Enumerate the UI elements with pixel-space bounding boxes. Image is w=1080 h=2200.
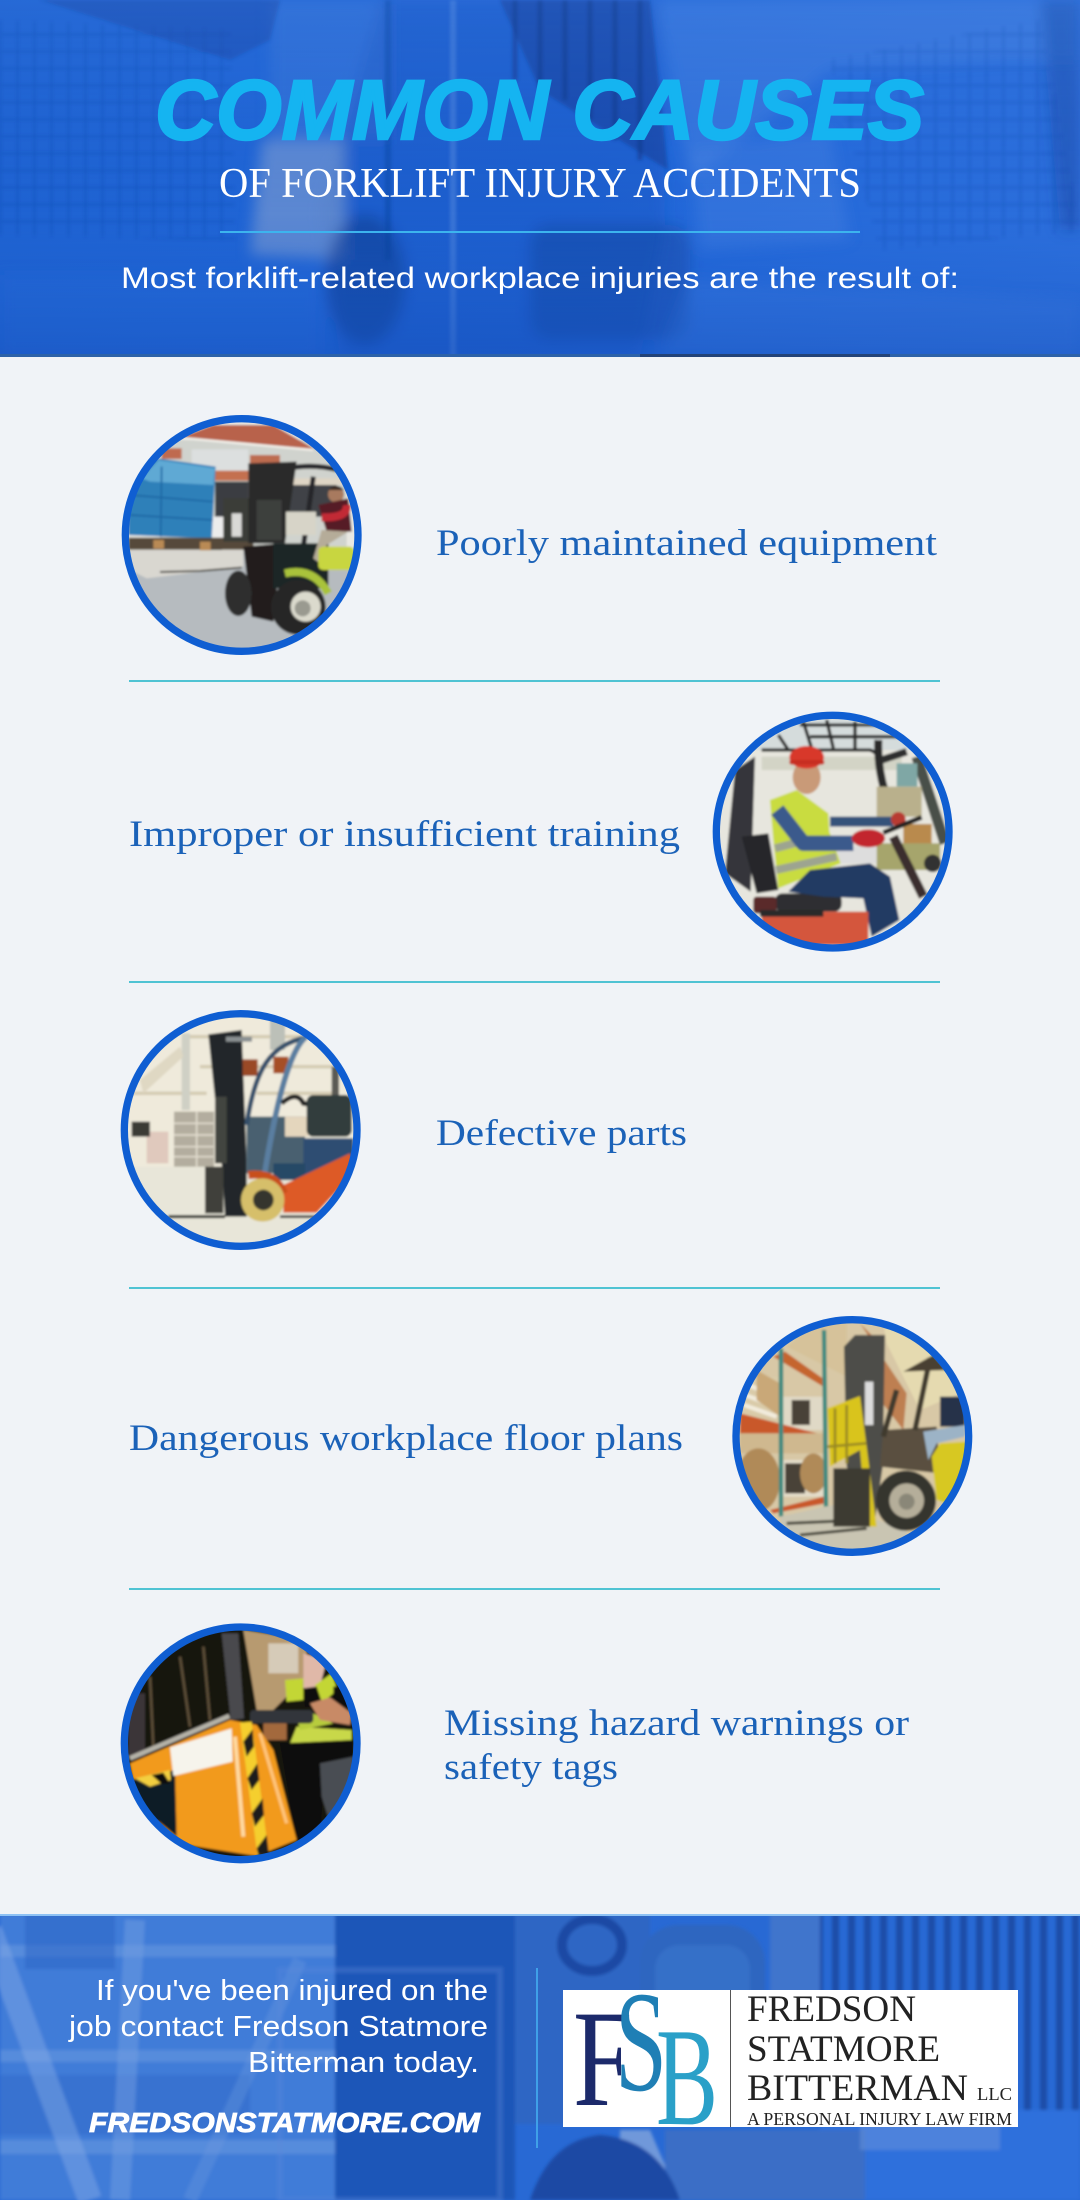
footer background photo (0, 1914, 1080, 2200)
cause 4: dangerous floor plans (130, 1316, 972, 1556)
logo monogram: F (573, 1982, 633, 2135)
label 2: Improper or insufficient training (129, 814, 680, 855)
logo wordmark: STATMORE (747, 2029, 940, 2070)
logo monogram: B (656, 2000, 718, 2155)
cause 1: poorly maintained equipment (122, 415, 937, 655)
photo circle 4 (732, 1316, 972, 1556)
cause 2: improper training (129, 700, 970, 960)
logo (563, 1963, 1018, 2155)
logo wordmark: LLC (977, 2084, 1012, 2104)
label 5 (444, 1703, 909, 1788)
label 3: Defective parts (436, 1113, 687, 1154)
logo wordmark: A PERSONAL INJURY LAW FIRM (747, 2109, 1012, 2129)
cause 5: missing hazard warnings (100, 1610, 909, 1870)
title: COMMON CAUSES (155, 63, 924, 157)
panel: footer (0, 1914, 1080, 2200)
label 5: safety tags (444, 1747, 618, 1788)
label 1: Poorly maintained equipment (436, 523, 938, 564)
logo wordmark (747, 1989, 1012, 2129)
logo monogram (573, 1963, 718, 2155)
photo circle 2 (712, 712, 953, 952)
footer message: If you've been injured on the (96, 1975, 488, 2007)
panel: header (0, 0, 1080, 357)
label 5: Missing hazard warnings or (444, 1703, 909, 1744)
footer message: job contact Fredson Statmore (68, 2011, 488, 2043)
intro text: Most forklift-related workplace injuries are the result of: (121, 262, 959, 295)
cause 3: defective parts (120, 1010, 686, 1250)
logo wordmark: BITTERMAN (747, 2068, 968, 2109)
subtitle: OF FORKLIFT INJURY ACCIDENTS (219, 161, 861, 207)
logo wordmark: FREDSON (747, 1989, 916, 2030)
website link: FREDSONSTATMORE.COM (89, 2107, 481, 2138)
photo circle 1 (122, 415, 362, 655)
footer message: Bitterman today. (248, 2047, 479, 2079)
photo circle 5 (120, 1623, 361, 1864)
label 4: Dangerous workplace floor plans (129, 1418, 683, 1459)
footer message (68, 1975, 488, 2079)
logo monogram: S (615, 1963, 667, 2122)
photo circle 3 (120, 1010, 361, 1250)
header background photo (0, 0, 1080, 357)
